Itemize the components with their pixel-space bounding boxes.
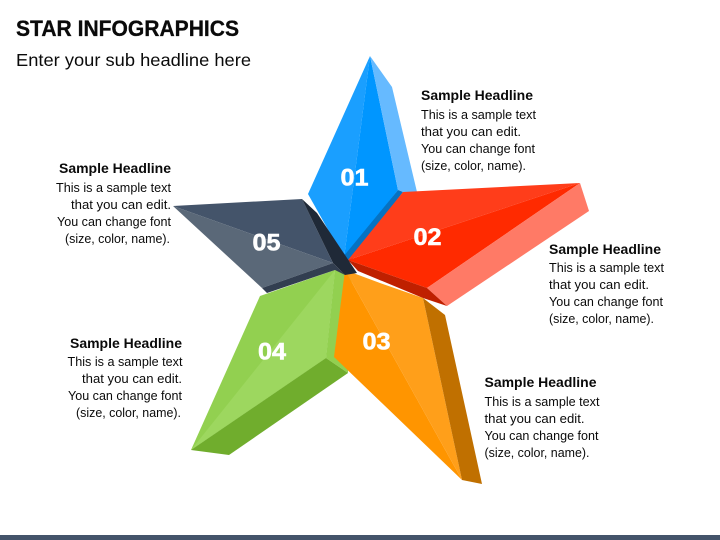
text block 04: that you can edit. bbox=[82, 372, 182, 386]
star point 01: blue bbox=[308, 56, 417, 262]
star point 04: green bbox=[191, 270, 352, 455]
text block 04 bbox=[68, 335, 183, 420]
text block 02: Sample Headline bbox=[549, 241, 661, 257]
star point 02: red bbox=[348, 183, 589, 306]
text block 01: Sample Headline bbox=[421, 87, 533, 103]
text block 03: This is a sample text bbox=[484, 395, 600, 409]
text block 05: (size, color, name). bbox=[65, 232, 170, 246]
text block 02: that you can edit. bbox=[549, 278, 649, 292]
text block 03: Sample Headline bbox=[484, 374, 597, 390]
number 03: 03 bbox=[362, 328, 390, 356]
text block 01 bbox=[421, 87, 537, 173]
number 04: 04 bbox=[258, 338, 287, 366]
text block 02: You can change font bbox=[549, 295, 664, 309]
text block 03: that you can edit. bbox=[484, 412, 584, 426]
text block 05: Sample Headline bbox=[59, 160, 171, 176]
text block 04: You can change font bbox=[68, 389, 183, 403]
text block 03 bbox=[484, 374, 600, 460]
number 05: 05 bbox=[252, 230, 280, 256]
footer bar bbox=[0, 535, 720, 540]
text block 03: (size, color, name). bbox=[484, 446, 590, 460]
text block 01: (size, color, name). bbox=[421, 159, 526, 173]
text block 01: You can change font bbox=[421, 142, 536, 156]
text block 01: that you can edit. bbox=[421, 125, 521, 139]
text block 05: This is a sample text bbox=[56, 181, 172, 195]
title: STAR INFOGRAPHICS bbox=[16, 16, 239, 41]
text block 02: (size, color, name). bbox=[549, 312, 654, 326]
text block 02 bbox=[549, 241, 665, 326]
text block 04: (size, color, name). bbox=[76, 406, 181, 420]
text block 03: You can change font bbox=[484, 429, 599, 443]
text block 01: This is a sample text bbox=[421, 108, 537, 122]
text block 05 bbox=[56, 160, 172, 246]
text block 02: This is a sample text bbox=[549, 261, 665, 275]
text block 04: This is a sample text bbox=[68, 355, 183, 369]
number 02: 02 bbox=[414, 224, 442, 251]
number 01: 01 bbox=[340, 164, 368, 192]
star point 03: orange bbox=[334, 270, 482, 484]
text block 05: You can change font bbox=[57, 215, 172, 229]
subtitle: Enter your sub headline here bbox=[16, 50, 251, 70]
star point 05: slate bbox=[173, 199, 357, 293]
text block 04: Sample Headline bbox=[70, 335, 182, 351]
text block 05: that you can edit. bbox=[71, 198, 171, 212]
